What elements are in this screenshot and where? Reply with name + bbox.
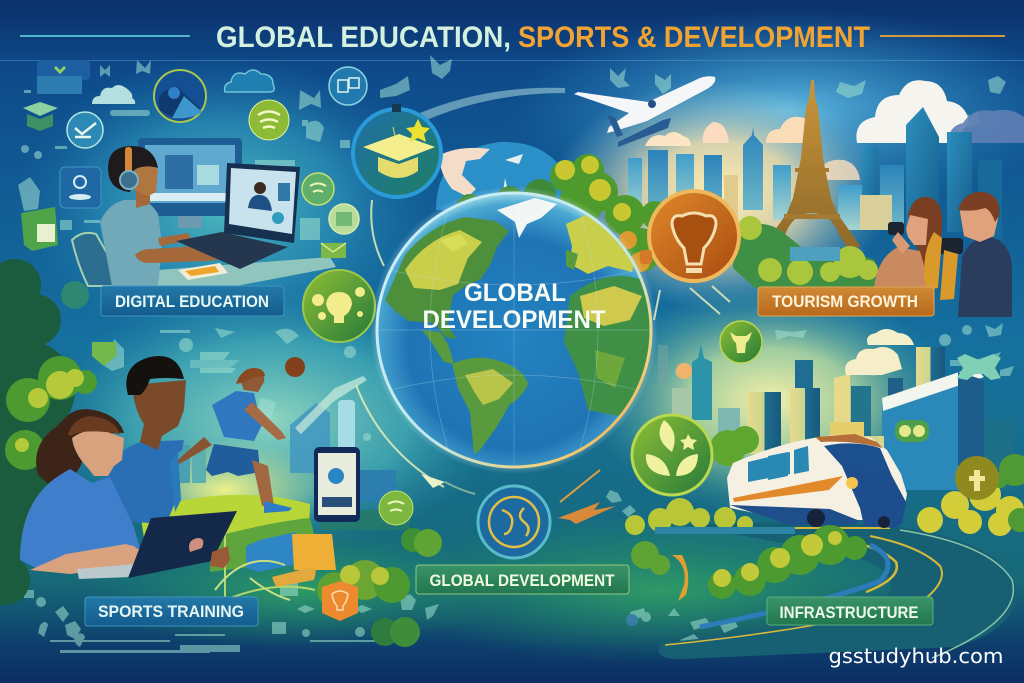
heading: globe: DEVELOPMENT — [422, 306, 606, 334]
label: tourism growth — [758, 287, 934, 316]
icon: boy — [100, 356, 186, 524]
panel: sports training — [20, 356, 442, 647]
icon: monitor — [138, 138, 242, 228]
icon: south america — [452, 358, 528, 454]
icon: location tile — [60, 167, 101, 208]
icon: leaf circle — [329, 204, 359, 234]
watermark: gsstudyhub.com — [828, 644, 1004, 668]
icon: world badge — [478, 486, 550, 558]
icon: leaf badge — [632, 415, 712, 495]
icon: eyes pill — [895, 420, 929, 442]
panel: floating icons left — [21, 60, 375, 342]
icon: buildings — [178, 376, 396, 502]
label: global development — [416, 565, 629, 594]
icon: wifi badge — [249, 100, 289, 140]
icon: check circle — [67, 112, 103, 148]
icon: orange glow — [676, 363, 692, 379]
icon: sports field — [140, 495, 310, 564]
icon: cloud — [92, 85, 135, 104]
icon: tourist man — [924, 192, 1012, 317]
icon: graduation cap badge — [353, 104, 441, 197]
icon: central america — [422, 330, 454, 364]
icon: eiffel tower — [763, 80, 861, 247]
panel: digital education — [72, 138, 336, 291]
icon: bulb badge — [303, 270, 375, 342]
icon: butterfly — [957, 354, 1001, 380]
icon: bird badge — [154, 70, 206, 122]
icon: europe — [566, 214, 638, 274]
label: sports training — [85, 597, 258, 626]
icon: bulb medal — [640, 191, 739, 281]
label: global development: GLOBAL DEVELOPMENT — [430, 572, 614, 590]
icon: arrows to centre badge — [421, 470, 616, 524]
icon: open box — [23, 102, 58, 131]
panel: ground foliage — [625, 426, 1024, 601]
icon: north america — [385, 217, 509, 339]
label: sports training: SPORTS TRAINING — [98, 602, 244, 621]
icon: globe — [370, 186, 658, 474]
icon: message card — [37, 60, 90, 94]
icon: bush 2 — [401, 528, 442, 557]
panel: small top globe — [415, 88, 669, 272]
icon: smartphone — [314, 447, 360, 522]
icon: tourist woman — [874, 197, 942, 287]
icon: skyline — [658, 329, 1013, 490]
icon: laptop — [77, 511, 237, 579]
title: SPORTS & DEVELOPMENT — [518, 21, 870, 54]
icon: greenland — [497, 198, 557, 238]
icon: wifi badge — [379, 491, 413, 525]
icon: cow badge — [720, 321, 762, 363]
panel: left foliage — [0, 259, 97, 605]
label: digital education: DIGITAL EDUCATION — [115, 293, 269, 311]
icon: chair — [72, 233, 126, 286]
label: infrastructure: INFRASTRUCTURE — [780, 604, 918, 622]
icon: white clouds — [856, 80, 969, 143]
icon: train — [727, 434, 907, 528]
label: tourism growth: TOURISM GROWTH — [772, 293, 918, 311]
icon: runner — [158, 357, 305, 513]
icon: coin badge — [955, 456, 999, 500]
title — [20, 21, 1005, 54]
icon: books — [246, 532, 336, 587]
icon: note — [178, 263, 228, 280]
title: GLOBAL EDUCATION, — [216, 21, 511, 54]
icon: bulb tile — [322, 581, 358, 621]
icon: curved path — [215, 561, 290, 600]
icon: student with headset — [100, 146, 239, 286]
icon: outline cloud — [225, 70, 274, 92]
panel: tourism greenery — [733, 216, 878, 290]
icon: girl with laptop — [20, 409, 146, 574]
panel: infrastructure — [625, 321, 1024, 659]
icon: bush — [317, 560, 410, 608]
icon: desk — [158, 257, 336, 291]
panel: tourism skyline — [628, 80, 1024, 240]
label: infrastructure — [767, 597, 933, 625]
icon: bush 3 — [371, 617, 420, 647]
icon: africa — [564, 276, 654, 416]
icon: airplane — [574, 76, 715, 147]
heading: globe: GLOBAL — [464, 279, 566, 307]
label: digital education — [101, 286, 284, 316]
icon: green card — [21, 207, 58, 251]
icon: road — [658, 522, 1016, 659]
icon: chat badge — [329, 67, 367, 105]
icon: arc arrows — [356, 200, 730, 494]
icon: green shield — [92, 342, 116, 366]
icon: laptop — [176, 163, 300, 269]
icon: envelope — [321, 243, 346, 258]
icon: wifi circle — [302, 173, 334, 205]
heading: globe — [422, 279, 606, 334]
